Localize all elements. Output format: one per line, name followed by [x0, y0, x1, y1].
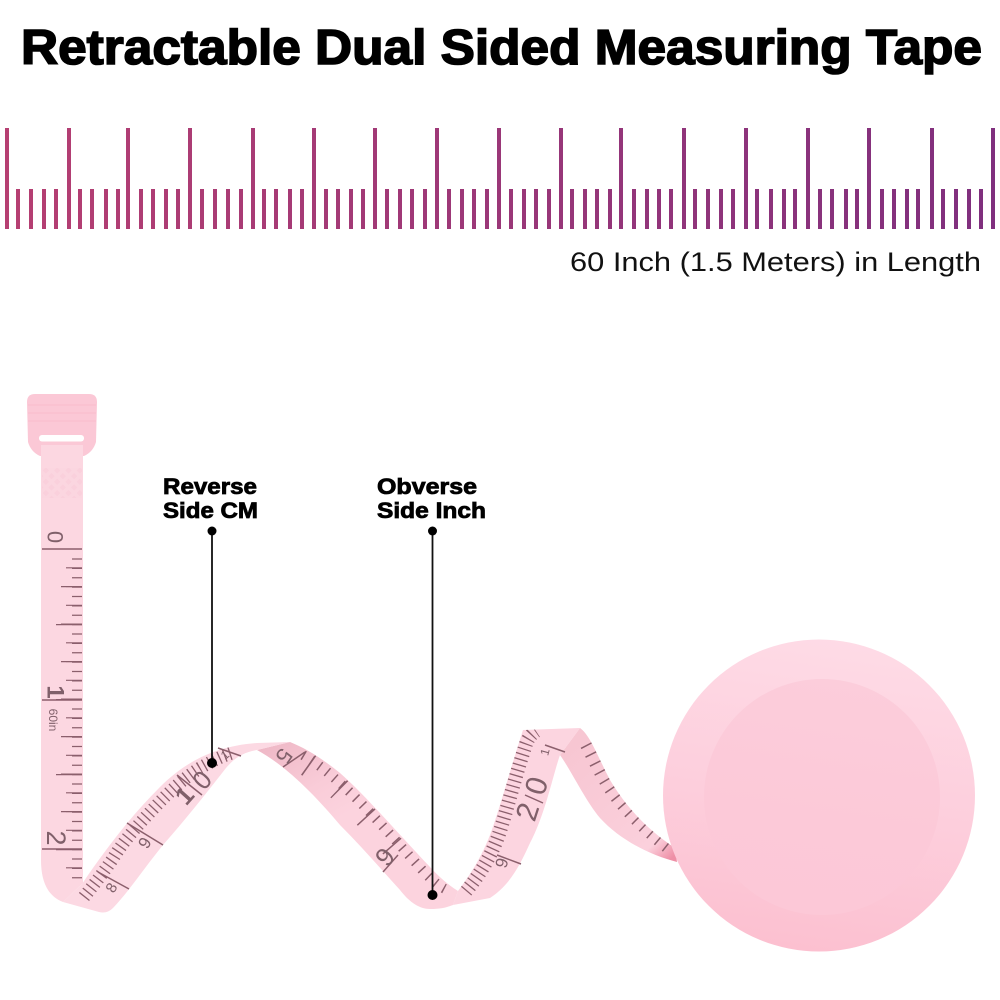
tape: front section rising: 0 — [519, 773, 555, 799]
tape: vertical inch section: 0 — [42, 531, 68, 543]
tape: back section inch side: 6 — [369, 842, 401, 872]
callout: reverse side cm: Side CM — [163, 498, 258, 523]
tape: front section rising: 9 — [492, 856, 512, 870]
tape: front section rising — [453, 728, 580, 905]
callout: reverse side cm — [163, 474, 258, 768]
length caption: 60 Inch (1.5 Meters) in Length — [570, 247, 981, 277]
callout: obverse side inch: Side Inch — [377, 498, 486, 523]
tape: vertical inch section: 60in — [46, 709, 60, 731]
tape: front section rising: 2 — [510, 799, 546, 825]
tape: front section centimetres — [63, 742, 290, 912]
tape: front section centimetres: 9 — [134, 834, 156, 852]
callout: obverse side inch — [377, 474, 486, 900]
title: Retractable Dual Sided Measuring Tape — [21, 21, 982, 75]
tape: front section rising: 1 — [537, 747, 553, 757]
tape: front section centimetres: 1 — [218, 747, 232, 763]
tape: front section centimetres: 1 — [170, 781, 200, 811]
callout: reverse side cm: Reverse — [163, 474, 257, 499]
tape: vertical inch section: 1 — [42, 685, 68, 699]
tape: vertical inch section: 2 — [41, 830, 71, 846]
tape: back section inch side — [257, 742, 458, 909]
callout: obverse side inch: Obverse — [377, 474, 477, 499]
retractable case disc — [663, 640, 975, 952]
tape: back section to disc — [560, 728, 677, 862]
ruler graphic — [7, 128, 993, 229]
tape: back section inch side: 5 — [270, 744, 298, 768]
tape: front section centimetres: 0 — [186, 765, 218, 795]
tape end tab — [27, 394, 97, 456]
tape: front section centimetres: 8 — [103, 880, 121, 896]
tape: vertical inch section — [41, 445, 83, 902]
